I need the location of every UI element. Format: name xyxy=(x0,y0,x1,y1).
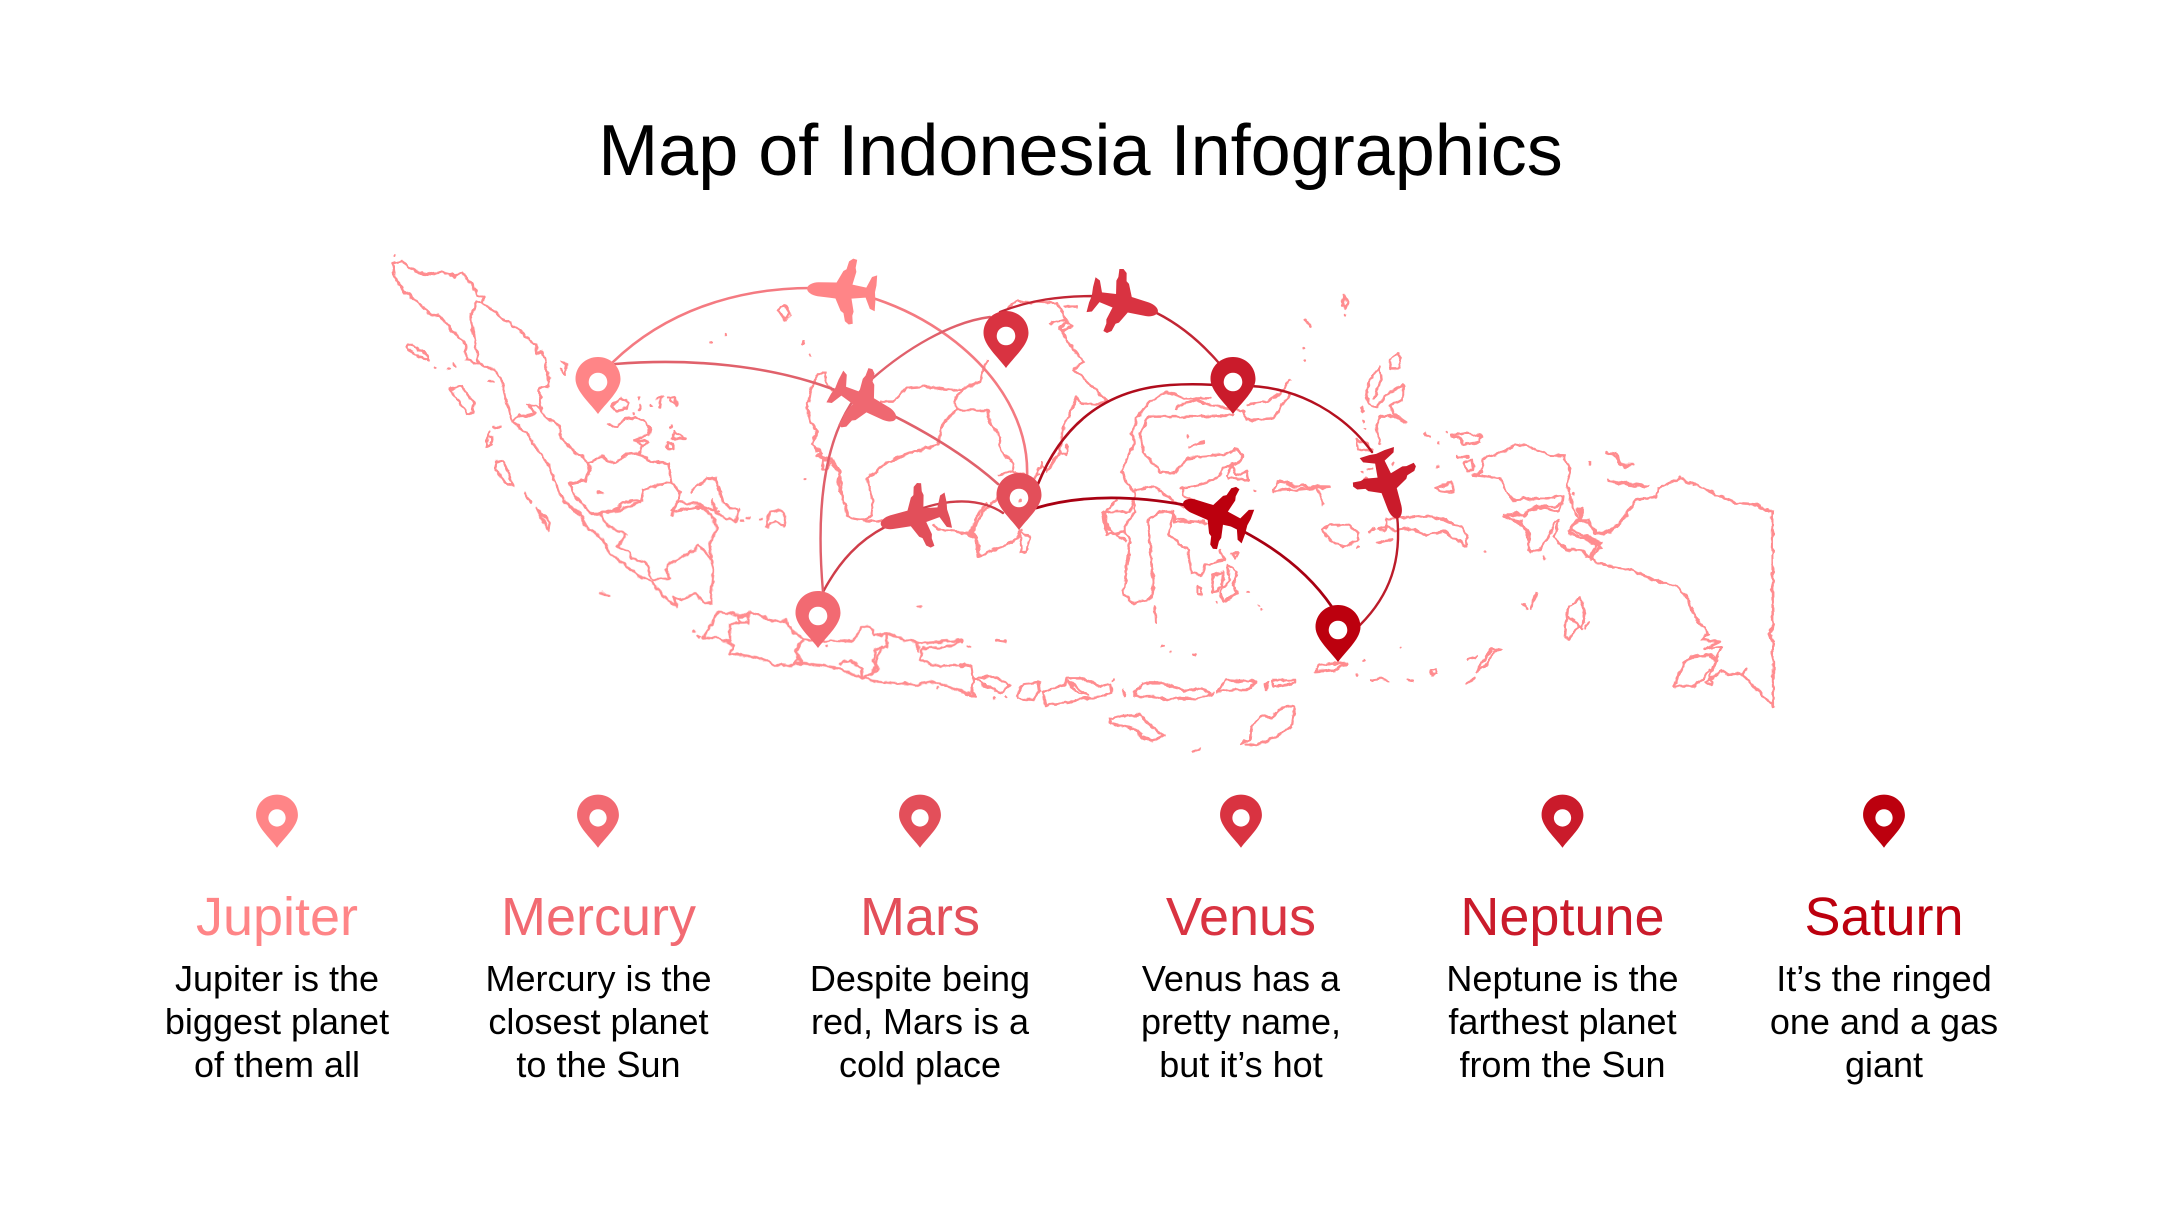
icon: Neptune pin xyxy=(1542,795,1583,848)
heading: Jupiter: Jupiter xyxy=(196,887,358,947)
text: Saturn description: one and a gas xyxy=(1770,1001,1998,1042)
region outlines: Sumatra north xyxy=(392,254,847,515)
heading: Venus: Venus xyxy=(1166,887,1316,947)
route: Mars pin to Neptune pin xyxy=(1038,384,1215,484)
region outlines: Maluku and Papua north xyxy=(1280,295,1773,550)
route: Jupiter pin to Mercury plane to Mars pin xyxy=(615,362,998,484)
icon: plane Mercury xyxy=(819,357,911,448)
heading: Mars: Mars xyxy=(860,887,980,947)
icon: map pin Mars xyxy=(996,473,1042,530)
text: Neptune description: from the Sun xyxy=(1459,1044,1666,1085)
panel: Jupiter xyxy=(165,795,389,1085)
route: Venus pin to Venus plane to Neptune pin xyxy=(1000,296,1218,362)
route: Jupiter pin to Jupiter plane to Mars pin xyxy=(613,288,1027,478)
route: Mercury pin to Venus pin xyxy=(821,317,990,592)
icon: plane Saturn xyxy=(1172,471,1259,557)
text: Mars description: Despite being xyxy=(810,958,1030,999)
text: Venus description: Venus has a xyxy=(1142,958,1341,999)
route: Neptune plane to Saturn pin xyxy=(1360,515,1398,625)
text: Mercury description: to the Sun xyxy=(516,1044,681,1085)
panel: Venus xyxy=(1141,795,1341,1085)
heading: Mercury: Mercury xyxy=(501,887,696,947)
route: Neptune pin to Neptune plane xyxy=(1250,386,1372,452)
text: Venus description: pretty name, xyxy=(1141,1001,1341,1042)
text: Mercury description: closest planet xyxy=(488,1001,709,1042)
region outlines: Kalimantan and north Sulawesi xyxy=(820,302,1290,542)
icon: map pin Neptune xyxy=(1210,357,1256,414)
icon: map pin Venus xyxy=(984,311,1028,368)
text: Jupiter description: Jupiter is the xyxy=(175,958,379,999)
text: Jupiter description: of them all xyxy=(194,1044,360,1085)
title: Map of Indonesia Infographics xyxy=(598,111,1563,191)
text: Mars description: cold place xyxy=(839,1044,1001,1085)
panel: Mercury xyxy=(485,795,712,1085)
icon: Saturn pin xyxy=(1863,795,1905,848)
Kalimantan west coast xyxy=(812,373,835,392)
icon: Mercury pin xyxy=(577,795,619,848)
icon: map pin Mercury xyxy=(796,591,840,648)
icon: map pin Saturn xyxy=(1316,605,1360,662)
icon: map pin Jupiter xyxy=(576,357,620,414)
icon: plane Mars xyxy=(874,478,955,557)
text: Mercury description: Mercury is the xyxy=(485,958,712,999)
heading: Saturn: Saturn xyxy=(1804,887,1964,947)
text: Neptune description: Neptune is the xyxy=(1446,958,1679,999)
panel: Neptune xyxy=(1446,795,1679,1085)
panel: Saturn xyxy=(1770,795,1998,1085)
map outlines xyxy=(392,254,1773,752)
panel: Mars xyxy=(810,795,1030,1085)
icon: plane Jupiter xyxy=(805,256,878,326)
icon: plane Venus xyxy=(1083,263,1166,344)
map of Indonesia xyxy=(392,254,1773,752)
text: Venus description: but it’s hot xyxy=(1159,1044,1323,1085)
text: Neptune description: farthest planet xyxy=(1448,1001,1677,1042)
region outlines: Papua south xyxy=(1408,500,1773,706)
heading: Neptune: Neptune xyxy=(1460,887,1665,947)
icon: Venus pin xyxy=(1220,795,1262,848)
region outlines: south Sumatra and Java xyxy=(537,500,970,693)
icon: Jupiter pin xyxy=(256,795,298,848)
icon: Mars pin xyxy=(899,795,941,848)
text: Saturn description: It’s the ringed xyxy=(1776,958,1992,999)
text: Mars description: red, Mars is a xyxy=(811,1001,1030,1042)
route: Mars pin to Saturn plane to Saturn pin xyxy=(1036,498,1332,607)
region outlines: Sulawesi south and Lesser Sunda Islands xyxy=(960,500,1413,752)
icon: plane Neptune xyxy=(1345,442,1430,528)
text: Jupiter description: biggest planet xyxy=(165,1001,389,1042)
route: Mercury pin to Mars plane to Mars pin xyxy=(823,501,1003,592)
text: Saturn description: giant xyxy=(1845,1044,1923,1085)
